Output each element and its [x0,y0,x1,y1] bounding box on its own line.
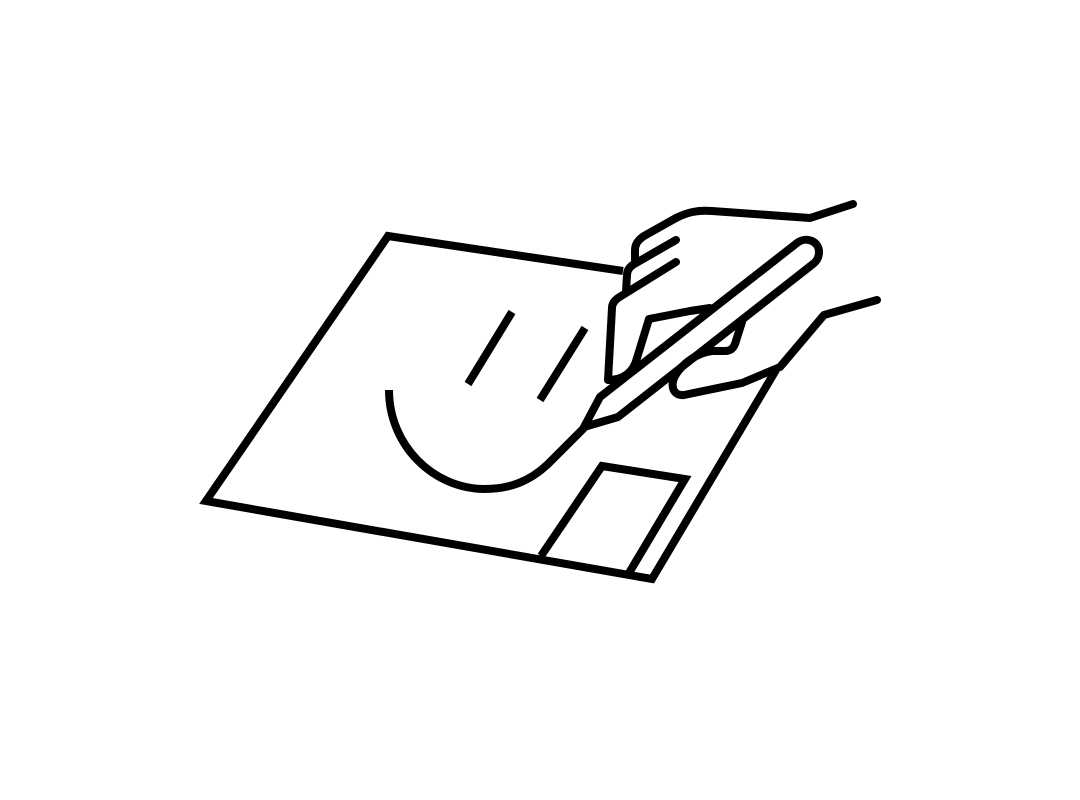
right eye [540,328,585,400]
icon: hand [608,204,877,395]
thumb and wrist [673,300,877,395]
panel: sheet of paper [206,236,776,579]
back of hand and wrist [635,204,853,260]
index finger [608,262,710,380]
upper finger [626,240,676,292]
icon: smiley face [389,312,585,489]
left eye [468,312,512,384]
smile [389,390,584,489]
paper corner rectangle [541,466,685,573]
icon: pen [584,240,819,427]
